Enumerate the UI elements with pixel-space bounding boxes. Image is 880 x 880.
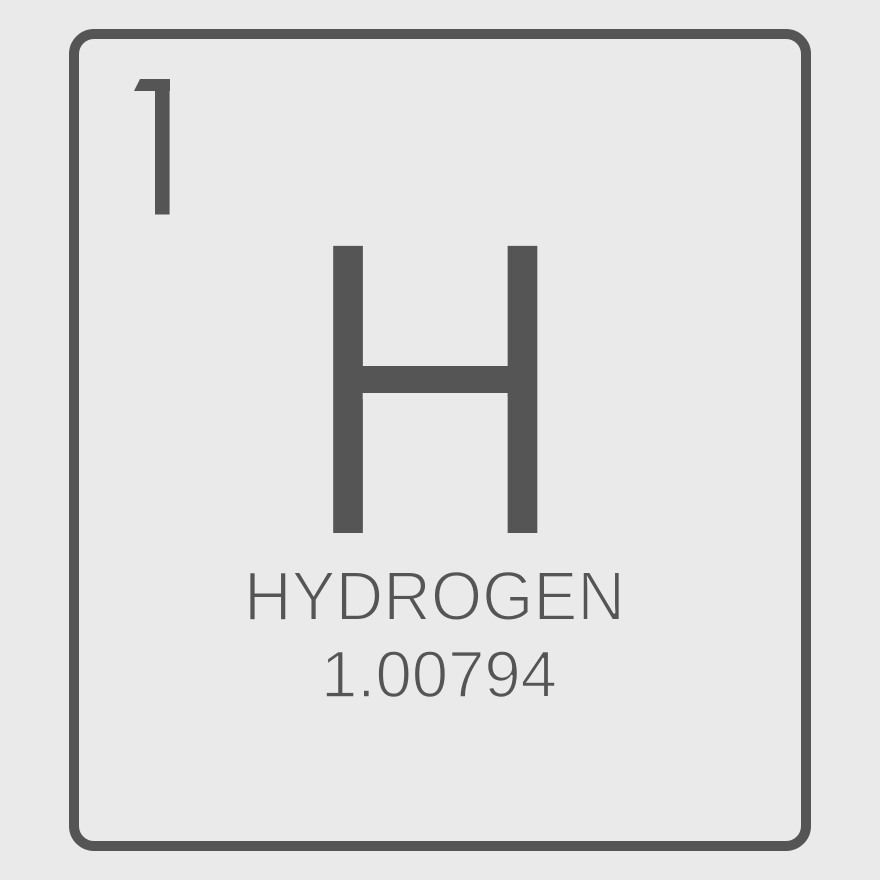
atomic number: 1 <box>113 30 206 279</box>
periodic table element card <box>69 29 811 851</box>
element symbol: H <box>300 152 571 627</box>
element name: HYDROGEN <box>244 557 625 635</box>
atomic weight: 1.00794 <box>321 637 557 711</box>
atomic number <box>134 79 170 214</box>
card border <box>74 34 806 846</box>
